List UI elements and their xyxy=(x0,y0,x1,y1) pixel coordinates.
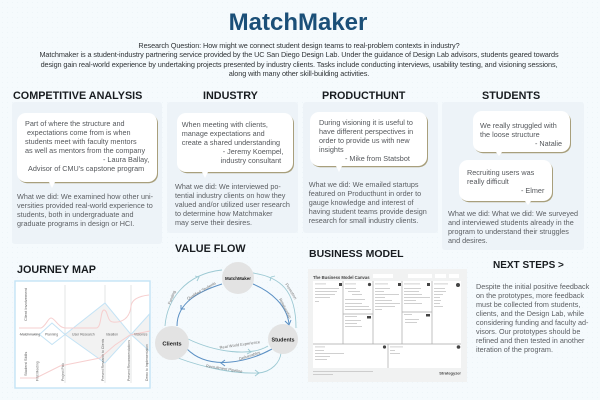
quote text: Elmer: really difficult xyxy=(467,177,509,186)
chart: journey map: Present Recommendations xyxy=(127,340,131,381)
image: business model canvas: Strategyzer xyxy=(439,370,461,376)
diagram: value flow: Funding xyxy=(167,290,177,305)
quote text: Mike: During visioning it is useful to xyxy=(319,118,413,127)
heading: competitive analysis: COMPETITIVE ANALYSIS xyxy=(13,90,142,102)
intro text block: design gain real-world experience by undertaking projects presented by industry clients. Tasks include conducting interviews, usability testing, and visioning sessions, xyxy=(41,60,557,68)
what we did text: research for small industry clients. xyxy=(309,216,418,225)
diagram: value flow: Relationship xyxy=(278,297,293,320)
quote text: Jeremy Koempel: - Jeremy Koempel, xyxy=(223,147,284,156)
title: MatchMaker xyxy=(229,9,367,36)
quote bubble: Elmer xyxy=(459,160,552,201)
what we did text xyxy=(448,209,578,245)
quote text: Elmer: - Elmer xyxy=(521,186,544,195)
heading: value flow: VALUE FLOW xyxy=(175,243,246,255)
chart: journey map: Student Skills xyxy=(23,352,28,376)
intro text block xyxy=(39,40,559,78)
what we did text: tential industry clients on how they xyxy=(175,191,285,200)
what we did text: students, both in undergraduate and xyxy=(17,210,134,219)
quote text: Natalie: We really struggled with xyxy=(480,121,557,130)
heading: business model: BUSINESS MODEL xyxy=(309,248,404,260)
chart: journey map: Matchmaking xyxy=(20,333,40,337)
what we did text: What we did: We interviewed po- xyxy=(175,182,281,190)
quote text: Natalie xyxy=(480,121,562,148)
diagram: value flow: Clients xyxy=(162,342,182,348)
text block: next steps: clients, and the Design Lab, while xyxy=(476,309,584,318)
panel: competitive analysis xyxy=(12,102,162,244)
what we did text: versities provided real-world experience to xyxy=(17,201,153,210)
what we did text xyxy=(17,192,153,228)
quote text: Mike xyxy=(319,118,413,163)
bubble tail xyxy=(202,172,208,178)
text block: next steps: visors. Our prototypes should be xyxy=(476,327,580,336)
diagram: value flow: Students xyxy=(271,338,295,344)
what we did text: What we did: We examined how other uni- xyxy=(17,192,153,200)
quote text: Jeremy Koempel: industry consultant xyxy=(221,156,281,165)
what we did text: featured on Producthunt in order to xyxy=(309,189,421,198)
diagram: value flow: Real World Experience xyxy=(219,339,261,350)
diagram: value flow: Qualified Students xyxy=(186,280,217,301)
heading: students: STUDENTS xyxy=(482,90,540,102)
text block: next steps: Despite the initial positive feedback xyxy=(476,282,589,290)
what we did text: to determine how Matchmaker xyxy=(175,209,273,218)
what we did text: having student teams provide design xyxy=(309,207,427,216)
text block: next steps: must be collected from students, xyxy=(476,300,580,309)
bubble tail xyxy=(336,166,342,172)
chart: journey map: Demo to Implementation xyxy=(145,344,149,381)
chart: journey map: Present Research to Clients xyxy=(101,338,105,381)
quote text: Laura Ballay: - Laura Ballay, xyxy=(103,155,149,164)
diagram: value flow: Deliverables xyxy=(238,350,261,361)
what we did text: and desires. xyxy=(448,236,488,245)
text block: next steps: refined and then tested in another xyxy=(476,336,584,345)
bubble tail xyxy=(525,201,531,205)
quote bubble: Laura Ballay xyxy=(17,113,157,182)
chart: journey map: First Meeting xyxy=(36,361,40,381)
what we did text xyxy=(308,180,427,225)
what we did text xyxy=(175,182,290,227)
what we did text: may serve their desires. xyxy=(175,218,252,227)
intro text block: Matchmaker is a student-industry partnering service provided by the UC San Diego Design Lab. Under the guidance of Design Lab advisors, students geared towards xyxy=(39,50,559,59)
quote bubble: Natalie xyxy=(473,111,570,152)
quote text: Mike: insights xyxy=(319,145,344,154)
quote text: Mike: - Mike from Statsbot xyxy=(345,154,410,163)
what we did text: program to understand their struggles xyxy=(448,227,569,236)
chart: journey map: Project Pick xyxy=(61,363,65,381)
panel: students xyxy=(442,102,584,250)
chart: journey map: Planning xyxy=(45,333,58,337)
quote text: Mike: have different perspectives in xyxy=(319,127,413,136)
heading: industry: INDUSTRY xyxy=(203,90,258,102)
heading: next steps: NEXT STEPS > xyxy=(493,260,564,271)
quote text: Jeremy Koempel xyxy=(182,120,284,165)
chart: journey map: User Research xyxy=(72,333,95,337)
quote text: Jeremy Koempel: create a shared understanding xyxy=(182,138,280,147)
bubble tail xyxy=(496,152,502,156)
quote text: Jeremy Koempel: When meeting with clients, xyxy=(182,120,268,129)
quote text: Laura Ballay xyxy=(25,119,149,173)
image: business model canvas: The Business Model Canvas xyxy=(313,275,370,280)
quote text: Laura Ballay: Advisor of CMU's capstone program xyxy=(28,164,144,173)
quote text: Mike: order to provide us with new xyxy=(319,136,410,145)
quote bubble: Mike xyxy=(310,112,427,166)
panel: producthunt xyxy=(303,102,438,233)
quote text: Natalie: the loose structure xyxy=(480,130,540,139)
heading: journey map: JOURNEY MAP xyxy=(17,264,96,276)
quote text: Laura Ballay: expectations come from is when xyxy=(27,128,131,137)
quote text: Jeremy Koempel: manage expectations and xyxy=(182,129,265,138)
bubble tail xyxy=(49,182,55,188)
what we did text: valued and/or utilized user research xyxy=(175,200,290,209)
quote text: Elmer xyxy=(467,168,544,195)
quote text: Laura Ballay: as well as mentors from the company xyxy=(25,146,145,155)
quote text: Laura Ballay: Part of where the structure and xyxy=(25,119,125,128)
heading: producthunt: PRODUCTHUNT xyxy=(322,90,405,102)
what we did text: What we did: What we did: We surveyed xyxy=(448,209,578,218)
diagram: value flow: MatchMaker xyxy=(225,276,251,281)
what we did text: What we did: We emailed startups xyxy=(309,180,419,188)
text block: next steps: on the prototypes, more feedback xyxy=(476,291,584,300)
diagram: value flow: Recruitment Pipeline xyxy=(206,363,244,374)
quote text: Elmer: Recruiting users was xyxy=(467,168,534,177)
text block: next steps: iteration of the program. xyxy=(476,345,553,354)
text block: next steps: considering funding and faculty ad- xyxy=(476,318,588,327)
intro text block: along with many other skill-building activities. xyxy=(229,69,369,78)
text block: next steps xyxy=(476,282,590,354)
what we did text: and interviewed students already in the xyxy=(448,218,574,227)
intro text block: Research Question: How might we connect student design teams to real-problem contexts in industry? xyxy=(138,40,460,50)
quote bubble: Jeremy Koempel xyxy=(177,113,293,172)
diagram: value flow: Promotion xyxy=(284,282,298,300)
panel: industry xyxy=(167,102,298,233)
chart: journey map: Visionize xyxy=(134,333,148,337)
chart: journey map: Client Involvement xyxy=(23,287,28,321)
what we did text: gauge knowledge and interest of xyxy=(309,198,414,207)
what we did text: graduate programs in design or HCI. xyxy=(17,219,134,228)
chart: journey map: Ideation xyxy=(106,333,118,337)
quote text: Natalie: - Natalie xyxy=(535,139,562,148)
quote text: Laura Ballay: students meet with faculty mentors xyxy=(25,137,137,146)
